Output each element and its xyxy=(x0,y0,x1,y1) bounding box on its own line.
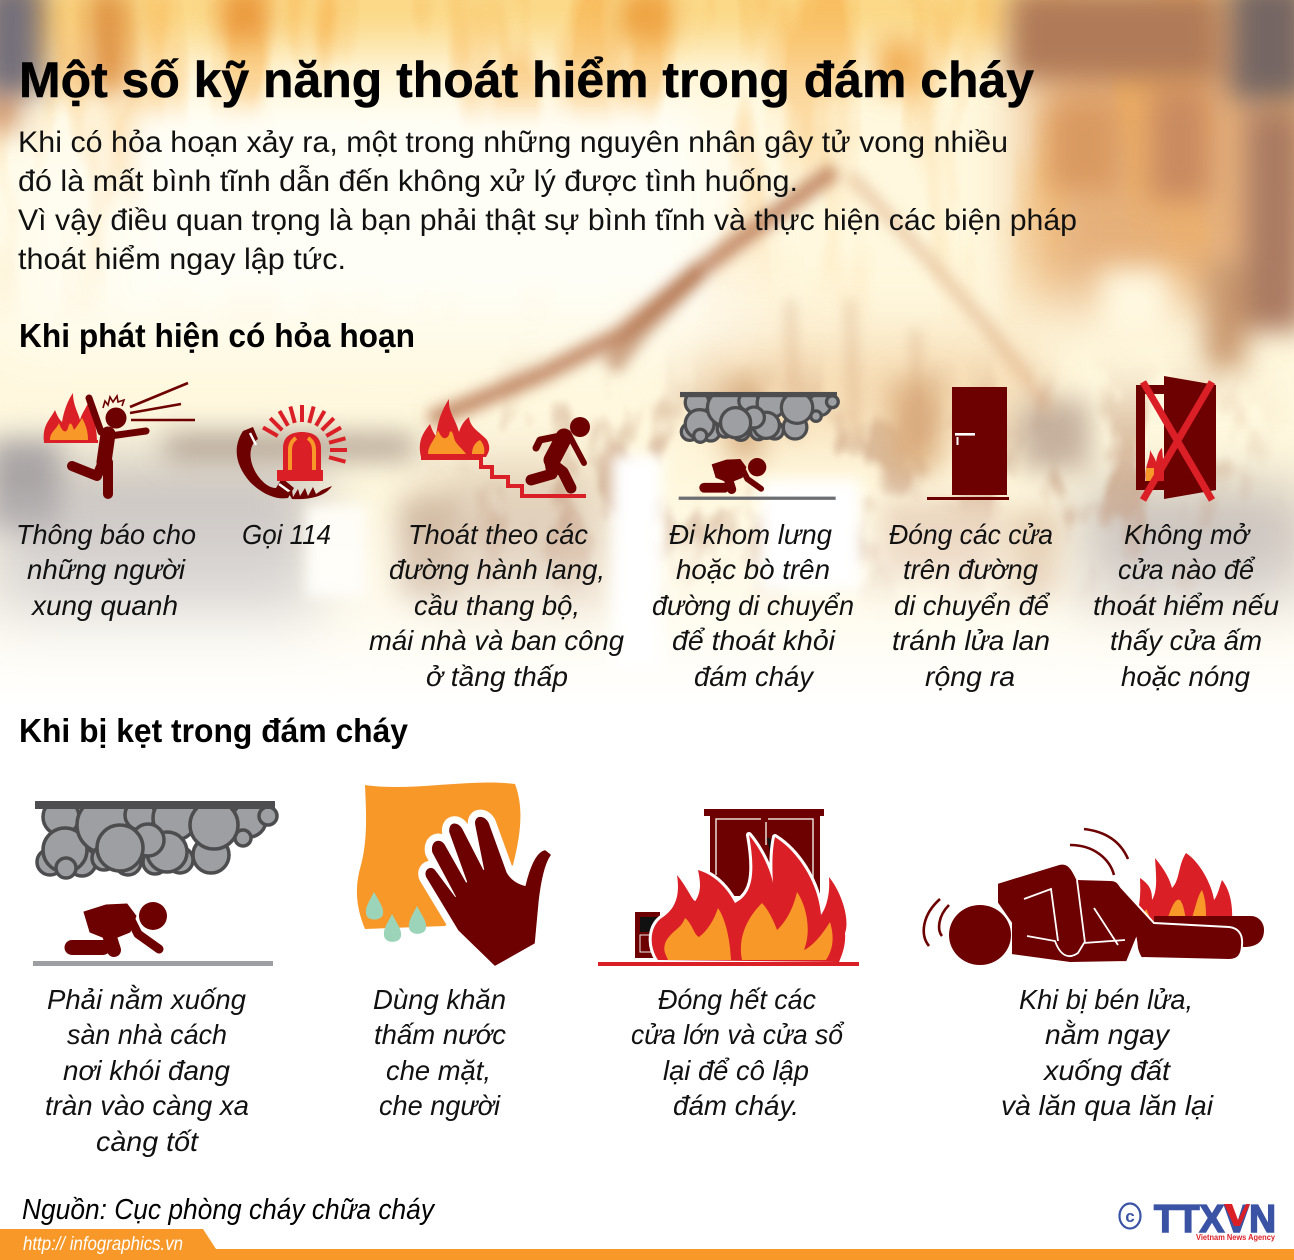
caption: notify people: những người xyxy=(27,554,186,585)
caption: crouch or crawl: đường di chuyển xyxy=(652,590,854,621)
caption: close doors and windows: đám cháy. xyxy=(673,1090,799,1121)
dark lintel and wall xyxy=(165,436,415,458)
caption: do not open hot doors: Không mở xyxy=(1124,519,1251,550)
caption: wet towel: che mặt, xyxy=(386,1055,491,1086)
icon: wet towel and hand xyxy=(357,782,550,965)
caption: close doors: tránh lửa lan xyxy=(892,625,1050,656)
icon: flame, stairs and runner xyxy=(420,399,590,496)
caption: close doors and windows: cửa lớn và cửa sổ xyxy=(631,1019,844,1050)
caption: close doors: Đóng các cửa xyxy=(889,519,1053,550)
caption: do not open hot doors: hoặc nóng xyxy=(1121,661,1250,692)
caption: escape routes: ở tầng thấp xyxy=(426,661,568,692)
caption: close doors: rộng ra xyxy=(925,661,1015,692)
caption: do not open hot doors xyxy=(1093,519,1279,692)
caption: crouch or crawl: hoặc bò trên xyxy=(676,554,830,585)
icon: person rolling on the ground xyxy=(924,829,1264,965)
intro text block: đó là mất bình tĩnh dẫn đến không xử lý được tình huống. xyxy=(18,165,798,198)
intro text block: thoát hiểm ngay lập tức. xyxy=(18,243,346,276)
caption: crouch or crawl: đám cháy xyxy=(694,661,815,692)
intro text block xyxy=(18,126,1077,276)
caption: wet towel xyxy=(373,984,506,1121)
icon: door with cross xyxy=(1136,376,1216,500)
caption: escape routes xyxy=(369,519,624,692)
caption: stop, drop and roll: và lăn qua lăn lại xyxy=(1001,1090,1214,1121)
icon: person shouting by fire xyxy=(44,383,195,494)
caption: escape routes: Thoát theo các xyxy=(408,519,588,550)
caption: notify people: Thông báo cho xyxy=(16,519,196,550)
logo: TTXVN: TTXVN xyxy=(1154,1198,1276,1241)
intro text block: Vì vậy điều quan trọng là bạn phải thật sự bình tĩnh và thực hiện các biện pháp xyxy=(18,204,1077,237)
caption: lie on the floor: tràn vào càng xa xyxy=(45,1090,249,1121)
source line: Nguồn: Cục phòng cháy chữa cháy xyxy=(22,1194,435,1226)
icon: closed door xyxy=(927,387,1009,500)
caption: stop, drop and roll: xuống đất xyxy=(1042,1055,1171,1086)
caption: do not open hot doors: cửa nào để xyxy=(1118,554,1255,585)
title: Một số kỹ năng thoát hiểm trong đám cháy xyxy=(19,52,1034,108)
caption: close doors: trên đường xyxy=(903,554,1038,585)
footer bar and tab xyxy=(0,1229,1294,1260)
caption: close doors and windows: lại để cô lập xyxy=(663,1055,809,1086)
heading: when trapped in a fire: Khi bị kẹt trong đám cháy xyxy=(19,712,409,749)
caption: close doors xyxy=(889,519,1053,692)
caption: close doors and windows xyxy=(631,984,844,1121)
heading: when a fire is detected: Khi phát hiện có hỏa hoạn xyxy=(19,317,415,354)
caption: stop, drop and roll: nằm ngay xyxy=(1045,1019,1171,1050)
caption: wet towel: che người xyxy=(379,1090,501,1121)
caption: wet towel: thấm nước xyxy=(374,1019,506,1050)
caption: notify people xyxy=(16,519,196,621)
caption: notify people: xung quanh xyxy=(30,590,178,621)
caption: lie on the floor: càng tốt xyxy=(96,1126,199,1157)
caption: do not open hot doors: thấy cửa ấm xyxy=(1110,625,1262,656)
caption: wet towel: Dùng khăn xyxy=(373,984,506,1015)
caption: lie on the floor: nơi khói đang xyxy=(63,1055,230,1086)
caption: lie on the floor xyxy=(45,984,249,1157)
background: burning house photo xyxy=(0,0,1294,734)
footer bar and tab: http:// infographics.vn xyxy=(23,1234,183,1255)
caption: crouch or crawl: để thoát khỏi xyxy=(672,625,836,656)
caption: close doors: di chuyển để xyxy=(894,590,1050,621)
logo: TTXVN: Vietnam News Agency xyxy=(1196,1233,1276,1242)
caption: stop, drop and roll xyxy=(1001,984,1214,1121)
caption: escape routes: mái nhà và ban công xyxy=(369,625,624,656)
icon: phone and siren xyxy=(237,405,347,499)
icon: flames against doors and window xyxy=(598,809,859,966)
roof line xyxy=(430,170,835,420)
smoke corners xyxy=(0,0,42,95)
icon: smoke and crouching person xyxy=(679,389,838,500)
caption: close doors and windows: Đóng hết các xyxy=(658,984,816,1015)
intro text block: Khi có hỏa hoạn xảy ra, một trong những nguyên nhân gây tử vong nhiều xyxy=(18,126,1008,159)
caption: stop, drop and roll: Khi bị bén lửa, xyxy=(1019,984,1193,1015)
caption: call 114: Gọi 114 xyxy=(242,519,331,550)
caption: escape routes: đường hành lang, xyxy=(389,554,605,585)
logo: TTXVN: c xyxy=(1125,1207,1135,1226)
caption: lie on the floor: Phải nằm xuống xyxy=(47,984,246,1015)
caption: lie on the floor: sàn nhà cách xyxy=(67,1019,227,1050)
caption: do not open hot doors: thoát hiểm nếu xyxy=(1093,590,1279,621)
icon: large smoke and crouching person xyxy=(33,796,277,966)
caption: crouch or crawl: Đi khom lưng xyxy=(669,519,832,550)
caption: escape routes: cầu thang bộ, xyxy=(414,590,580,621)
caption: crouch or crawl xyxy=(652,519,854,692)
